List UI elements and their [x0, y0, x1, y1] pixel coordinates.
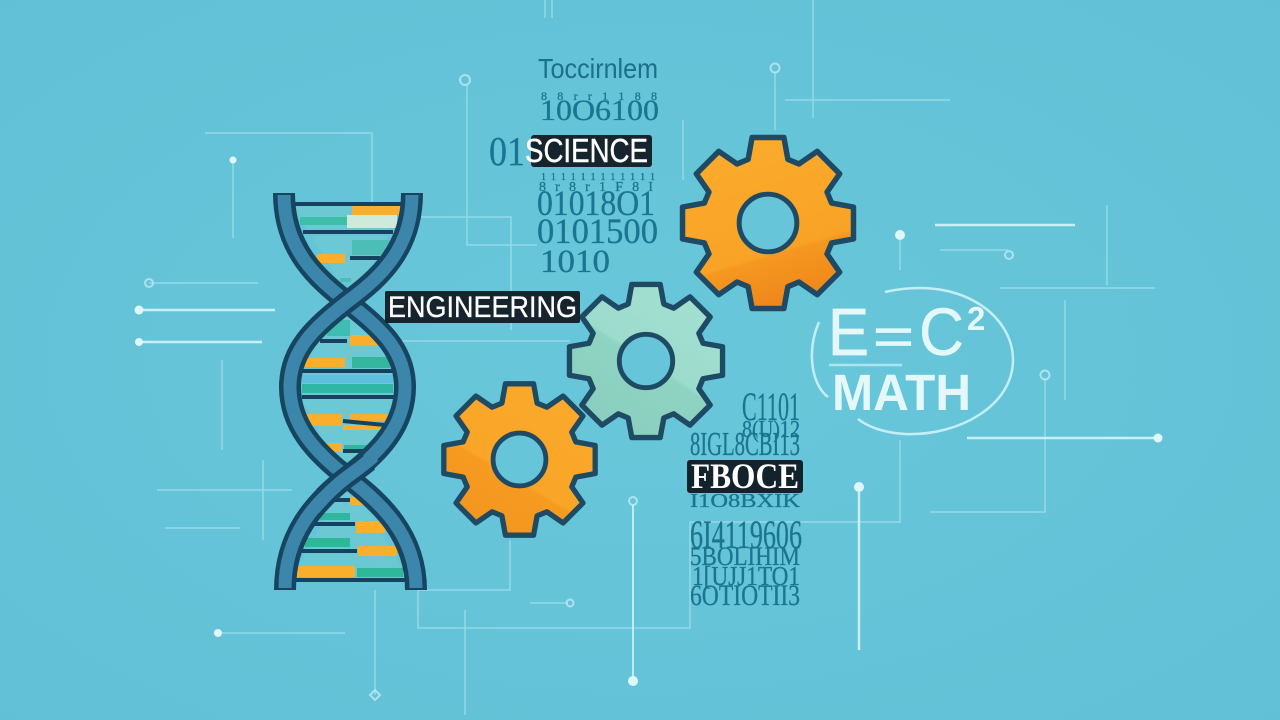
label: science: SCIENCE: [525, 132, 648, 169]
circuit lines: centre: [370, 0, 900, 715]
text block: lower code column: [690, 384, 802, 612]
text block: lower code column: 6I4119606: [690, 512, 802, 557]
text block: science code column: [489, 53, 659, 280]
text block: lower code column: C1101: [742, 384, 800, 429]
circuit lines: left side: [134, 133, 372, 637]
badge ring: [812, 288, 1013, 434]
formula: E: E: [828, 295, 869, 370]
superscript: 2: [967, 300, 985, 337]
text block: science code column: 10O6100: [540, 94, 659, 127]
text block: lower code column: I1O8BXIK: [690, 490, 801, 512]
underline: [829, 364, 902, 366]
math formula badge: [812, 288, 1013, 434]
math label: MATH: [832, 364, 971, 421]
DNA base pairs: [290, 204, 410, 582]
text block: science code column: 8 8 r r 1 1 8 8: [541, 89, 657, 103]
text block: lower code column: 5BOLIHIM: [690, 542, 800, 571]
heading: garbled title: Toccirnlem: [538, 53, 658, 84]
label: engineering: ENGINEERING: [388, 291, 577, 324]
formula: equals: =: [873, 308, 914, 366]
text block: lower code column: 8(U)12: [742, 417, 800, 443]
text block: science code column: 01: [489, 128, 525, 174]
DNA double helix: [284, 193, 416, 590]
text block: science code column: 01018O1: [537, 183, 655, 223]
gear: bottom orange: [444, 384, 595, 535]
text block: lower code column: 1[UJJ1TO1: [692, 561, 800, 591]
formula: C: C: [919, 295, 964, 370]
text block: science code column: 1010: [540, 244, 610, 280]
text block: lower code column: 6OTIOTII3: [690, 579, 800, 612]
DNA strand B: [290, 193, 416, 590]
gear: top orange: [683, 138, 853, 308]
label: garbled technology box: FBOCE: [691, 456, 799, 496]
text block: science code column: 1 1 1 1 1 1 1 1 1 1 1 1: [541, 172, 655, 183]
text block: lower code column: 8IGL8CBI13: [690, 426, 800, 463]
gear: mint centre: [569, 284, 723, 438]
text block: science code column: 8 r 8 r 1 F 8 I: [539, 180, 653, 195]
DNA strand A: [284, 193, 405, 590]
text block: science code column: 0101500: [537, 211, 658, 251]
DNA strand A overlap: [314, 456, 374, 509]
circuit lines: right side: [770, 0, 1162, 650]
